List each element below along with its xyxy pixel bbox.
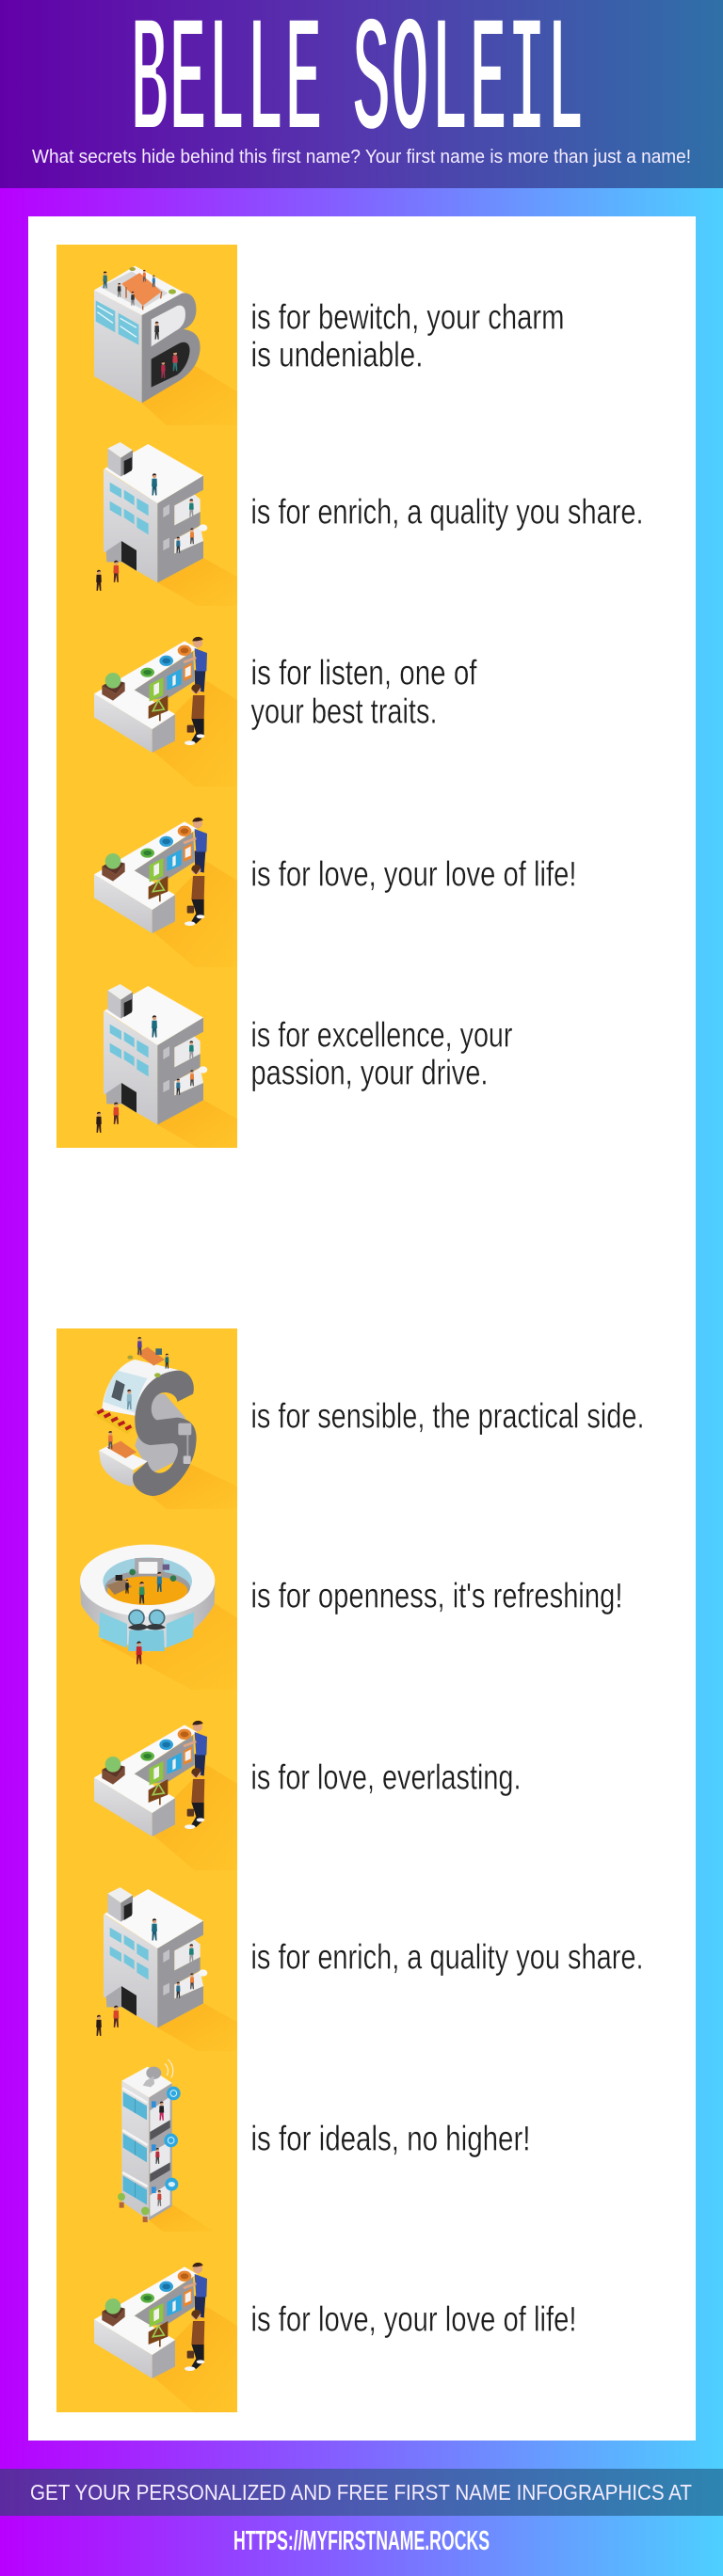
text: L: is for love, your love of life!	[250, 2299, 576, 2339]
icon: letter L recycling counter	[56, 787, 237, 967]
panel: white content card	[28, 216, 696, 2441]
footer band with call to action	[0, 2469, 723, 2516]
icon: letter L recycling counter	[56, 1690, 237, 1870]
icon: letter L recycling counter	[56, 2232, 237, 2412]
text: L second line: your best traits.	[250, 692, 437, 730]
section: last name SOLEIL	[56, 1328, 644, 2412]
text: E second line: passion, your drive.	[250, 1054, 488, 1091]
header band	[0, 0, 723, 188]
icon: letter O ring building	[56, 1509, 237, 1690]
icon: letter L recycling counter	[56, 606, 237, 787]
text: O: is for openness, it's refreshing!	[250, 1577, 623, 1614]
section: first name BELLE	[56, 245, 644, 1148]
footer url: HTTPS://MYFIRSTNAME.ROCKS	[233, 2526, 490, 2556]
icon: letter E building	[56, 967, 237, 1148]
text: B: is for bewitch, your charm	[250, 297, 565, 337]
text: B second line: is undeniable.	[250, 335, 424, 374]
text: E: is for excellence, your	[250, 1016, 512, 1054]
text: L: is for love, everlasting.	[250, 1757, 522, 1797]
icon: letter E building	[56, 425, 237, 606]
icon: letter S building	[56, 1328, 237, 1509]
text: L: is for love, your love of life!	[250, 854, 576, 894]
subtitle: What secrets hide behind this first name? Your first name is more than just a name!	[32, 147, 691, 167]
icon: letter I tower	[56, 2051, 237, 2232]
text: L: is for listen, one of	[250, 653, 477, 692]
text: I: is for ideals, no higher!	[250, 2119, 531, 2158]
icon: letter E building	[56, 1870, 237, 2051]
icon: letter B building	[56, 245, 237, 425]
